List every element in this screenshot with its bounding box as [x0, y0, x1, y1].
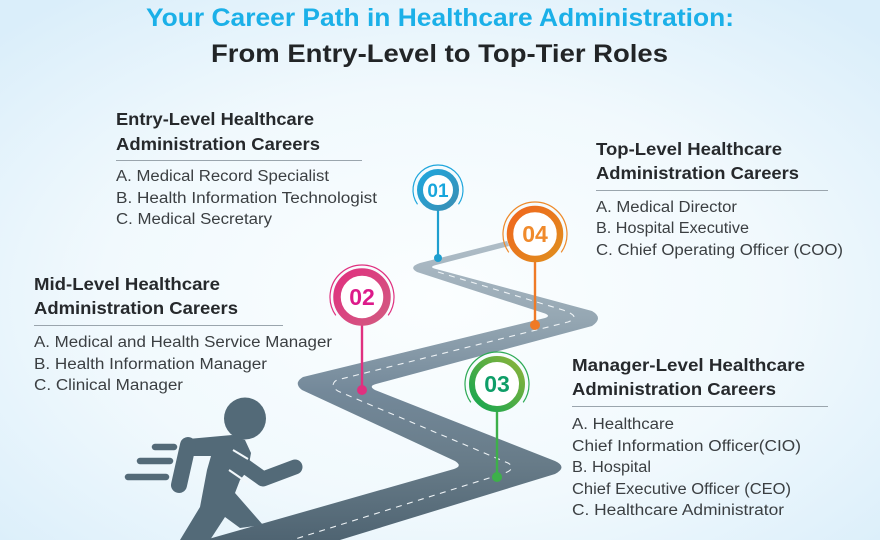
- torso and legs: [180, 435, 263, 540]
- panel: manager-level careers: [572, 355, 828, 519]
- pin 04: [503, 202, 567, 330]
- panel: mid-level careers: C. Clinical Manager: [34, 377, 183, 394]
- panel: entry-level careers: Administration Careers: [116, 134, 320, 154]
- panel: top-level careers: Administration Careers: [596, 163, 799, 183]
- panel: mid-level careers: Administration Careers: [34, 298, 238, 318]
- panel: mid-level careers: A. Medical and Health Service Manager: [34, 334, 332, 351]
- panel: entry-level careers: Entry-Level Healthcare: [116, 109, 314, 129]
- pin 03: [465, 352, 529, 482]
- panel: top-level careers: Top-Level Healthcare: [596, 139, 782, 159]
- panel: mid-level careers: [34, 274, 332, 394]
- panel: manager-level careers: Chief Information Officer(CIO): [572, 438, 801, 455]
- panel: manager-level careers: Chief Executive Officer (CEO): [572, 481, 791, 498]
- pin 01: 01: [427, 181, 449, 202]
- back arm: [179, 445, 188, 485]
- panel: entry-level careers: C. Medical Secretary: [116, 211, 272, 228]
- panel: top-level careers: B. Hospital Executive: [596, 220, 749, 237]
- panel: top-level careers: [596, 139, 843, 259]
- panel: mid-level careers: Mid-Level Healthcare: [34, 274, 220, 294]
- panel: entry-level careers: [116, 109, 378, 228]
- panel: mid-level careers: B. Health Information Manager: [34, 356, 267, 373]
- panel: top-level careers: C. Chief Operating Officer (COO): [596, 242, 843, 259]
- panel: top-level careers: A. Medical Director: [596, 199, 737, 216]
- pin 01: [413, 165, 463, 262]
- panel: manager-level careers: C. Healthcare Administrator: [572, 502, 784, 519]
- panel: entry-level careers: A. Medical Record Specialist: [116, 168, 330, 185]
- panel: entry-level careers: B. Health Information Technologist: [116, 190, 378, 207]
- title: [146, 4, 734, 68]
- front arm: [242, 464, 295, 479]
- pin 02: 02: [349, 284, 375, 310]
- panel: manager-level careers: B. Hospital: [572, 459, 651, 476]
- title: From Entry-Level to Top-Tier Roles: [211, 40, 668, 68]
- panel: manager-level careers: A. Healthcare: [572, 416, 674, 433]
- winding road: [205, 241, 598, 540]
- speed lines: [128, 447, 174, 477]
- head: [224, 398, 266, 440]
- panel: manager-level careers: Manager-Level Healthcare: [572, 355, 805, 375]
- pin 02: [330, 265, 394, 395]
- pin 04: 04: [522, 221, 548, 247]
- panel: manager-level careers: Administration Careers: [572, 379, 776, 399]
- title: Your Career Path in Healthcare Administration:: [146, 4, 734, 32]
- arm highlights: [229, 450, 248, 483]
- runner figure: [128, 398, 295, 540]
- pin 03: 03: [484, 371, 510, 397]
